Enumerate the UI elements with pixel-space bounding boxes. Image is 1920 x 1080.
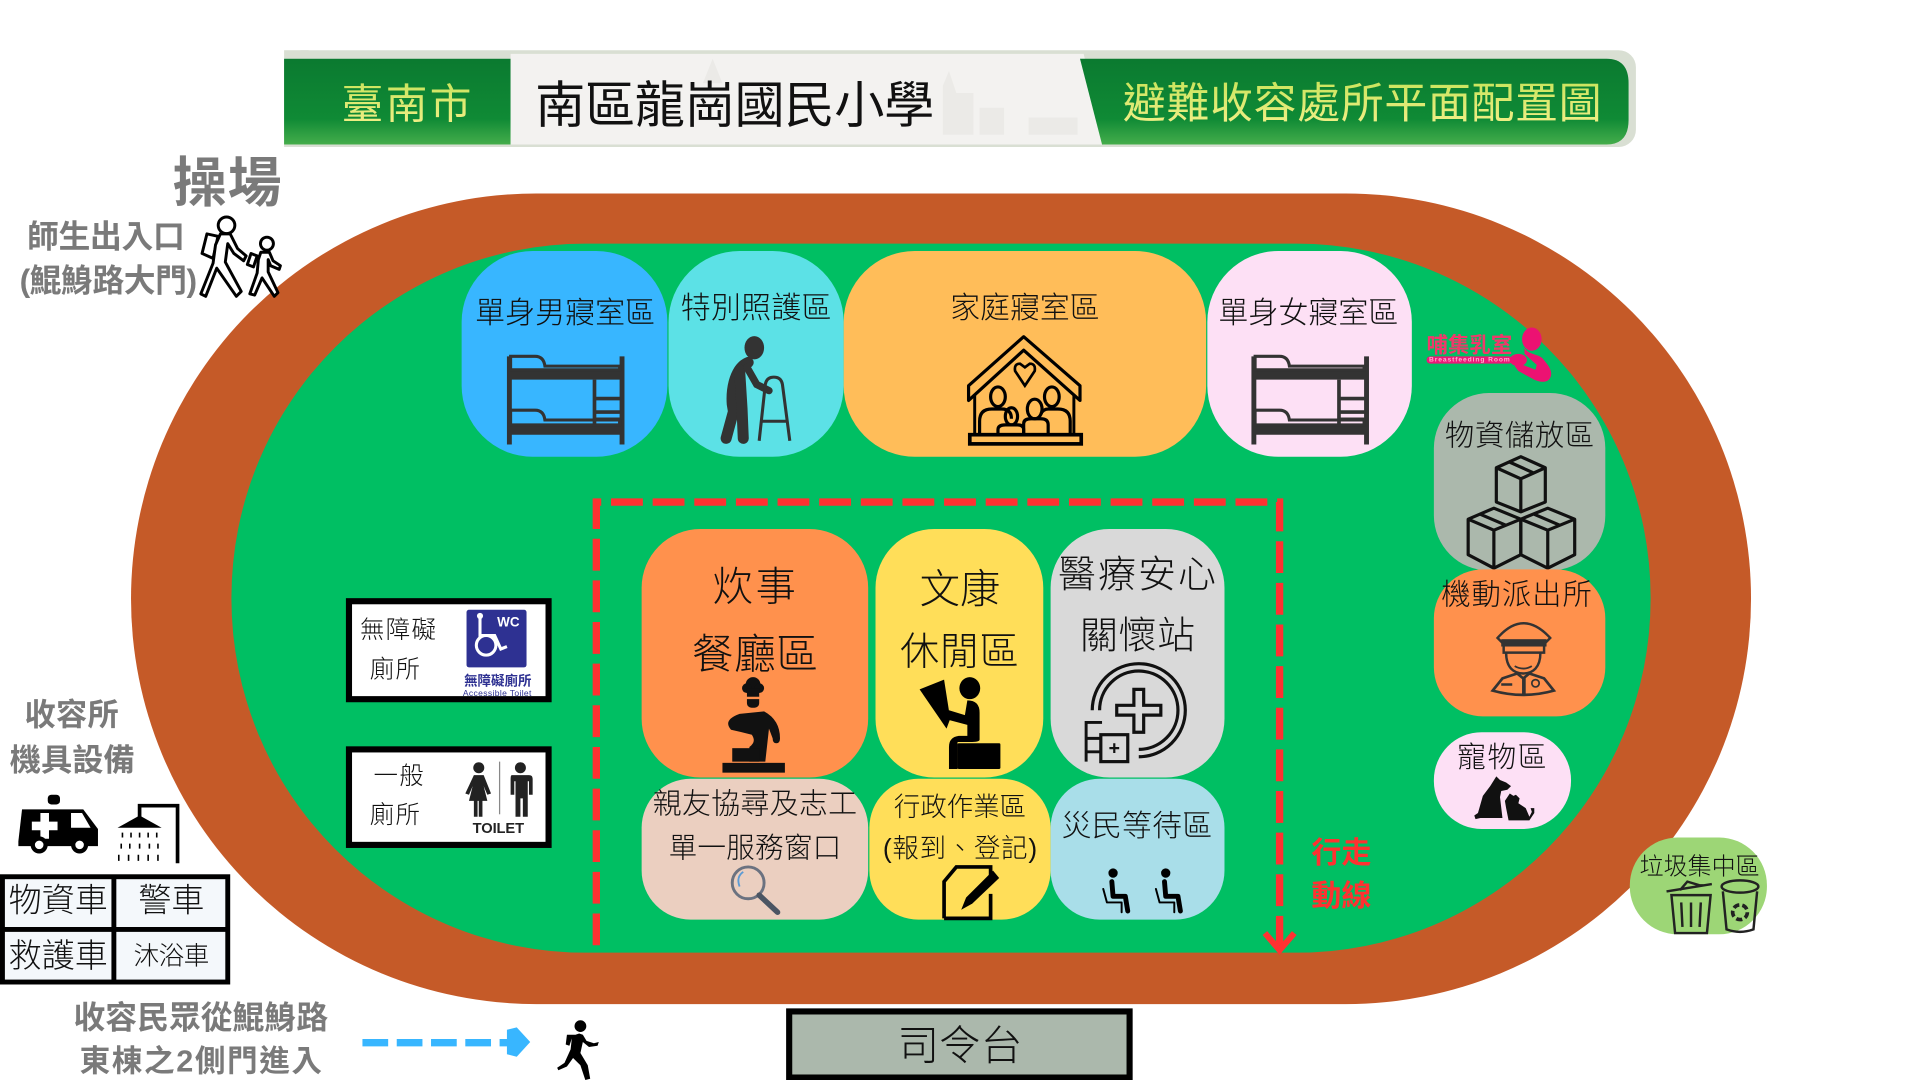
icon: chef — [722, 677, 785, 773]
label: walking route — [1311, 837, 1371, 913]
table: vehicles: 物資車 — [9, 883, 108, 920]
banner: city tab: 臺南市 — [342, 81, 471, 128]
panel: single men's dorm — [462, 251, 667, 457]
table: vehicles: 救護車 — [9, 938, 108, 975]
icon: woman and man: TOILET — [473, 821, 524, 837]
sign: accessible toilet: 無障礙 — [360, 616, 436, 644]
arrowhead — [1265, 933, 1294, 950]
panel: family dorm — [844, 251, 1206, 457]
icon: ambulance — [18, 795, 98, 853]
panel: single women's dorm: 單身女寢室區 — [1218, 297, 1398, 330]
panel: family search and volunteer service — [642, 779, 868, 920]
table: vehicles: 警車 — [138, 883, 204, 920]
title banner — [284, 50, 1636, 147]
sign: accessible toilet — [349, 601, 549, 699]
icon: trash and recycling bins — [1667, 880, 1758, 933]
heading: shelter equipment: 收容所 — [24, 698, 119, 733]
icon: police officer — [1493, 623, 1554, 695]
sign: general toilet: 一般 — [373, 762, 424, 790]
icon: wheelchair WC: WC — [497, 615, 520, 630]
sign: accessible toilet: 廁所 — [370, 655, 420, 683]
icon: bunk bed — [507, 356, 624, 444]
icon: seated reader — [920, 677, 1000, 769]
icon: document and pencil — [944, 867, 999, 918]
panel: administration: 行政作業區 — [894, 792, 1026, 822]
text: staff and student entrance — [20, 218, 197, 298]
panel: recreation area — [876, 529, 1043, 778]
panel: single men's dorm: 單身男寢室區 — [475, 297, 655, 330]
breastfeeding room sign — [1427, 328, 1551, 382]
panel: mobile police station — [1434, 569, 1605, 716]
panel: special care area — [669, 251, 844, 457]
banner: school name — [511, 54, 1104, 144]
panel: mobile police station: 機動派出所 — [1441, 579, 1592, 612]
icon: wheelchair WC: Accessible Toilet — [463, 688, 532, 698]
text: entry instructions: 東棟之2側門進入 — [80, 1045, 322, 1079]
arrow: evacuee route — [362, 1027, 530, 1057]
icon: medical cross and clipboard — [1086, 664, 1185, 762]
panel: special care area: 特別照護區 — [681, 292, 831, 325]
panel: family search and volunteer service: 親友協尋及志工 — [653, 787, 857, 820]
panel: medical care station — [1051, 529, 1224, 778]
banner: school name: 南區龍崗國民小學 — [535, 77, 934, 133]
label: walking route: 動線 — [1311, 880, 1371, 913]
panel: administration: (報到、登記) — [883, 834, 1037, 864]
icon: seated people — [1103, 868, 1180, 912]
table: vehicles — [2, 877, 228, 982]
text: staff and student entrance: 師生出入口 — [27, 218, 185, 254]
walking route dashed line — [596, 502, 1294, 950]
panel: evacuee waiting area: 災民等待區 — [1062, 810, 1212, 843]
panel: medical care station: 醫療安心 — [1058, 555, 1216, 597]
banner: plan title — [1080, 59, 1629, 144]
panel: evacuee waiting area — [1051, 779, 1224, 920]
panel: family search and volunteer service: 單一服務窗口 — [669, 833, 841, 865]
text: entry instructions: 收容民眾從鯤鯓路 — [73, 1000, 328, 1036]
icon: bunk bed — [1251, 356, 1369, 444]
panel: kitchen and dining — [642, 529, 868, 778]
panel: family dorm: 家庭寢室區 — [950, 292, 1100, 325]
panel: kitchen and dining: 炊事 — [713, 564, 796, 610]
icon: walking person — [557, 1020, 599, 1080]
panel: supply storage — [1434, 393, 1605, 571]
text: staff and student entrance: (鯤鯓路大門) — [20, 262, 197, 298]
breastfeeding room sign: 哺集乳室 — [1427, 332, 1512, 357]
infield — [231, 244, 1651, 953]
panel: reviewing stand: 司令台 — [898, 1022, 1022, 1069]
panel: medical care station: 關懷站 — [1080, 616, 1195, 658]
sign: general toilet — [349, 749, 549, 845]
icon: wheelchair WC: 無障礙廁所 — [464, 672, 532, 688]
panel: single women's dorm — [1207, 251, 1412, 457]
running track — [131, 193, 1751, 1004]
icon: nursing mother — [1510, 328, 1551, 382]
panel: pet area — [1434, 732, 1571, 829]
breastfeeding room sign: Breastfeeding Room — [1429, 356, 1510, 364]
banner: city tab — [284, 59, 511, 144]
panel: waste collection: 垃圾集中區 — [1640, 853, 1760, 880]
panel: administration — [869, 779, 1051, 920]
table: vehicles: 沐浴車 — [133, 941, 209, 970]
panel: pet area: 寵物區 — [1457, 742, 1547, 774]
icon: family house — [969, 337, 1081, 444]
icon: shower — [118, 806, 178, 863]
banner: plan title: 避難收容處所平面配置圖 — [1123, 80, 1602, 128]
icon: wheelchair WC — [463, 610, 532, 698]
heading: playground: 操場 — [173, 154, 282, 214]
heading: shelter equipment: 機具設備 — [10, 743, 135, 778]
heading: shelter equipment — [10, 698, 135, 778]
panel: reviewing stand — [789, 1011, 1130, 1078]
sign: general toilet: 廁所 — [370, 801, 420, 829]
panel: recreation area: 文康 — [920, 566, 1000, 612]
icon: dog and cat — [1474, 776, 1534, 820]
icon: woman and man — [465, 762, 533, 837]
panel: supply storage: 物資儲放區 — [1445, 419, 1594, 452]
icon: elder with walker — [726, 336, 790, 441]
icon: walking people — [201, 217, 280, 296]
text: entry instructions — [73, 1000, 328, 1079]
panel: waste collection — [1630, 838, 1767, 934]
icon: magnifier — [732, 867, 778, 912]
icon: stacked boxes — [1468, 457, 1575, 568]
panel: kitchen and dining: 餐廳區 — [692, 630, 818, 677]
label: walking route: 行走 — [1311, 837, 1371, 870]
panel: recreation area: 休閒區 — [900, 631, 1019, 674]
